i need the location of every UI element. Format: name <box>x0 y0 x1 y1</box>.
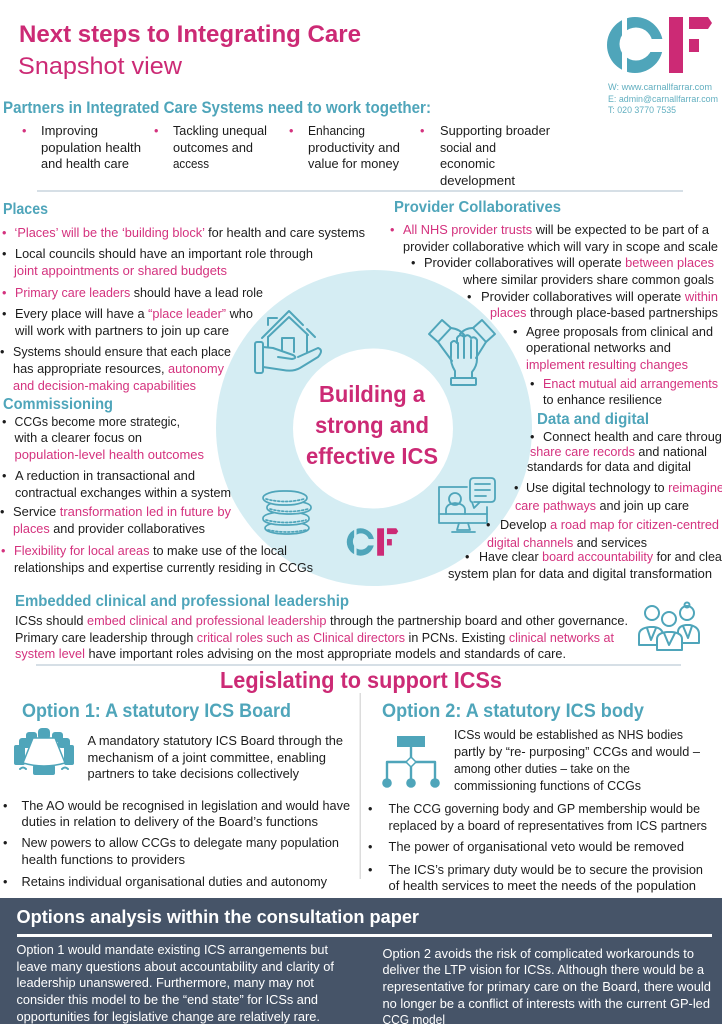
data heading: Data and digital <box>537 411 649 428</box>
commissioning bullets: Flexibility for local areas to make use of the local <box>14 544 287 558</box>
section heading: legislating: Legislating to support ICSs <box>220 667 502 693</box>
option 1 bullets: The AO would be recognised in legislation and would have <box>22 799 350 813</box>
commissioning bullets: • <box>2 415 6 429</box>
centre title: Building a <box>319 381 425 407</box>
commissioning bullets: contractual exchanges within a system <box>15 486 231 500</box>
provider bullets: • <box>530 377 534 391</box>
commissioning bullets: population-level health outcomes <box>14 448 204 462</box>
data bullets: Use digital technology to reimagine <box>526 481 722 495</box>
contact details: T: 020 3770 7535 <box>608 105 676 115</box>
places bullets: • <box>2 286 6 300</box>
data bullets: standards for data and digital <box>527 460 691 474</box>
option 2 analysis: representative for primary care on the Board, there would <box>382 980 711 994</box>
panel: option 1 <box>3 700 350 889</box>
partner aim 1: Improving <box>41 124 98 138</box>
commissioning bullets: places and provider collaboratives <box>13 522 205 536</box>
commissioning heading: Commissioning <box>3 396 113 413</box>
option 1 bullets <box>3 799 350 889</box>
data bullets: • <box>486 518 490 532</box>
embedded heading: Embedded clinical and professional leadership <box>15 593 349 610</box>
places bullets: • <box>0 345 4 359</box>
partner aim 4 <box>420 124 551 188</box>
logo: Carnall Farrar <box>607 15 712 75</box>
data bullets: Have clear board accountability for and clear <box>479 550 722 564</box>
centre title: effective ICS <box>306 443 438 469</box>
panel: option 2 <box>368 700 707 893</box>
provider bullets: implement resulting changes <box>526 358 688 372</box>
provider bullets: where similar providers share common goals <box>462 273 714 287</box>
commissioning bullets: • <box>2 469 6 483</box>
partner aim 3: Enhancing <box>308 124 365 138</box>
data bullets: digital channels and services <box>487 536 647 550</box>
places bullets: • <box>2 307 6 321</box>
provider bullets: • <box>411 256 415 270</box>
option 1 description: A mandatory statutory ICS Board through the <box>88 734 343 748</box>
data bullets <box>448 430 722 581</box>
data bullets: • <box>530 430 534 444</box>
panel: options analysis <box>0 898 722 1024</box>
places bullets: will work with partners to join up care <box>14 324 229 338</box>
option 2 bullets: • <box>368 840 372 854</box>
option 1 description: mechanism of a joint committee, enabling <box>88 751 326 765</box>
partner aim 1: and health care <box>41 157 129 171</box>
provider bullets: All NHS provider trusts will be expected to be part of a <box>403 223 710 237</box>
icon: clinicians group <box>639 602 699 650</box>
provider bullets: Agree proposals from clinical and <box>526 325 713 339</box>
centre title: strong and <box>315 412 429 438</box>
commissioning bullets: • <box>0 505 4 519</box>
option 1 bullets: • <box>3 875 7 889</box>
option 2 description: partly by “re- purposing” CCGs and would – <box>454 745 701 759</box>
coin 3 <box>263 512 309 525</box>
option 1 analysis: Option 1 would mandate existing ICS arrangements but <box>16 943 328 957</box>
subtitle: Snapshot view <box>18 53 183 80</box>
main title: Next steps to Integrating Care <box>19 21 361 48</box>
option 2 description: commissioning functions of CCGs <box>454 779 641 793</box>
embedded paragraph: Primary care leadership through critical roles such as Clinical directors in PCNs. Existing clinical networks at <box>15 631 614 645</box>
places bullets: Every place will have a “place leader” who <box>15 307 253 321</box>
places bullets: has appropriate resources, autonomy <box>13 362 225 376</box>
provider bullets: • <box>390 223 394 237</box>
option 2 bullets: The ICS’s primary duty would be to secure the provision <box>388 863 703 877</box>
partner aim 1: population health <box>41 141 141 155</box>
partner aim 2 <box>154 124 267 171</box>
partner aim 4: economic <box>440 157 496 171</box>
partner aim 1 <box>22 124 141 171</box>
logo: small CF mark <box>347 527 398 557</box>
places bullets: and decision-making capabilities <box>13 379 196 393</box>
commissioning bullets: • <box>1 544 5 558</box>
data bullets: share care records and national <box>530 445 707 459</box>
option 2 bullets: of health services to meet the needs of the population <box>388 879 696 893</box>
outer ring <box>216 270 532 586</box>
provider bullets <box>390 223 718 407</box>
places bullets: joint appointments or shared budgets <box>13 264 227 278</box>
provider bullets: to enhance resilience <box>543 393 662 407</box>
panel: data and digital <box>448 411 722 581</box>
icon: organisation chart <box>382 736 440 788</box>
partner aim 2: access <box>173 157 209 171</box>
commissioning bullets: relationships and expertise currently residing in CCGs <box>14 561 313 575</box>
option 1 analysis: opportunities for legislative change are relatively rare. <box>16 1010 320 1024</box>
icon: video consultation monitor <box>439 478 495 532</box>
central ring diagram <box>216 270 532 586</box>
partner aim 2: outcomes and <box>173 141 253 155</box>
icon: stack of coins <box>263 491 311 534</box>
panel heading: Options analysis within the consultation paper <box>16 906 419 927</box>
option 1 bullets: health functions to providers <box>22 853 185 867</box>
commissioning bullets: CCGs become more strategic, <box>14 415 180 429</box>
icon: house in hand <box>255 311 321 373</box>
inner circle <box>293 348 453 508</box>
option 2 bullets: The power of organisational veto would be removed <box>388 840 684 854</box>
option 1 analysis: leave many questions about accountability and clarity of <box>16 960 334 974</box>
option 2 description: among other duties – take on the <box>454 762 630 776</box>
places bullets: Systems should ensure that each place <box>13 345 231 359</box>
option 1 bullets: • <box>3 799 7 813</box>
places bullets: ‘Places’ will be the ‘building block’ for health and care systems <box>14 226 365 240</box>
icon: board table <box>14 728 74 775</box>
centre title <box>306 381 438 469</box>
coin 1 <box>263 491 307 505</box>
option 2 bullets: • <box>368 863 372 877</box>
places bullets: • <box>2 247 6 261</box>
provider bullets: • <box>513 325 517 339</box>
option 2 analysis: Option 2 avoids the risk of complicated workarounds to <box>382 947 694 961</box>
provider bullets: Provider collaboratives will operate within <box>481 290 718 304</box>
panel: embedded clinical leadership <box>15 593 699 661</box>
partner aim 3: productivity and <box>308 141 400 155</box>
option 1 heading: Option 1: A statutory ICS Board <box>22 700 291 722</box>
coin 2 <box>267 501 311 514</box>
option 2 description <box>454 728 701 793</box>
panel: places <box>0 201 365 393</box>
panel: provider collaboratives <box>390 199 718 407</box>
option 1 bullets: duties in relation to delivery of the Board’s functions <box>22 815 318 829</box>
places heading: Places <box>3 201 48 218</box>
partner aim 3: • <box>289 124 293 138</box>
partners heading: Partners in Integrated Care Systems need to work together: <box>3 99 431 117</box>
panel: partners <box>3 99 551 188</box>
icon: joined hands <box>429 320 495 385</box>
partner aim 1: • <box>22 124 26 138</box>
provider bullets: • <box>467 290 471 304</box>
option 2 bullets: replaced by a board of representatives from ICS partners <box>388 819 707 833</box>
option 1 description <box>88 734 343 781</box>
provider heading: Provider Collaboratives <box>394 199 561 216</box>
provider bullets: operational networks and <box>526 341 671 355</box>
data bullets: Develop a road map for citizen-centred <box>500 518 719 532</box>
option 2 bullets: The CCG governing body and GP membership would be <box>388 802 700 816</box>
partner aim 3 <box>289 124 400 171</box>
option 1 description: partners to take decisions collectively <box>88 767 300 781</box>
data bullets: • <box>465 550 469 564</box>
option 2 analysis <box>382 947 711 1024</box>
panel: commissioning <box>0 396 313 575</box>
coin 4 <box>265 522 309 534</box>
option 1 analysis <box>16 943 334 1024</box>
partner aim 4: • <box>420 124 424 138</box>
option 1 bullets: • <box>3 836 7 850</box>
provider bullets: Provider collaboratives will operate between places <box>424 256 714 270</box>
option 1 bullets: Retains individual organisational duties and autonomy <box>22 875 328 889</box>
option 1 bullets: New powers to allow CCGs to delegate many population <box>22 836 339 850</box>
partner aim 2: Tackling unequal <box>173 124 267 138</box>
embedded paragraph: ICSs should embed clinical and professional leadership through the partnership board and other governance. <box>15 614 628 628</box>
option 2 heading: Option 2: A statutory ICS body <box>382 700 644 722</box>
places bullets <box>0 226 365 393</box>
option 1 analysis: leadership unanswered. Furthermore, many may not <box>16 976 314 990</box>
option 2 bullets <box>368 802 707 893</box>
partner aim 2: • <box>154 124 158 138</box>
embedded paragraph: system level have important roles advising on the most appropriate models and standards of care. <box>15 647 566 661</box>
option 2 analysis: deliver the LTP vision for ICSs. Although there would be a <box>382 963 705 977</box>
commissioning bullets: with a clearer focus on <box>13 431 142 445</box>
places bullets: Local councils should have an important role through <box>15 247 313 261</box>
places bullets: • <box>2 226 6 240</box>
embedded paragraph <box>15 614 628 661</box>
option 1 analysis: consider this model to be the “end state” for ICSs and <box>16 993 318 1007</box>
panel background <box>0 898 722 1024</box>
header title <box>18 21 361 80</box>
partner aim 3: value for money <box>308 157 400 171</box>
commissioning bullets: Service transformation led in future by <box>13 505 232 519</box>
option 2 analysis: no longer be a conflict of interests with the current GP-led <box>382 997 710 1011</box>
provider bullets: places through place-based partnerships <box>490 306 718 320</box>
data bullets: system plan for data and digital transformation <box>448 567 712 581</box>
option 2 bullets: • <box>368 802 372 816</box>
commissioning bullets: A reduction in transactional and <box>15 469 195 483</box>
contact details <box>608 82 718 115</box>
provider bullets: provider collaborative which will vary in scope and scale <box>403 240 718 254</box>
contact details: W: www.carnallfarrar.com <box>608 82 712 92</box>
partner aim 4: social and <box>440 141 496 155</box>
data bullets: care pathways and join up care <box>515 499 689 513</box>
partner aim 4: development <box>440 174 515 188</box>
option 2 description: ICSs would be established as NHS bodies <box>454 728 683 742</box>
data bullets: • <box>514 481 518 495</box>
places bullets: Primary care leaders should have a lead role <box>15 286 263 300</box>
partner aim 4: Supporting broader <box>440 124 551 138</box>
commissioning bullets <box>0 415 313 575</box>
provider bullets: Enact mutual aid arrangements <box>543 377 718 391</box>
contact details: E: admin@carnallfarrar.com <box>608 94 718 104</box>
